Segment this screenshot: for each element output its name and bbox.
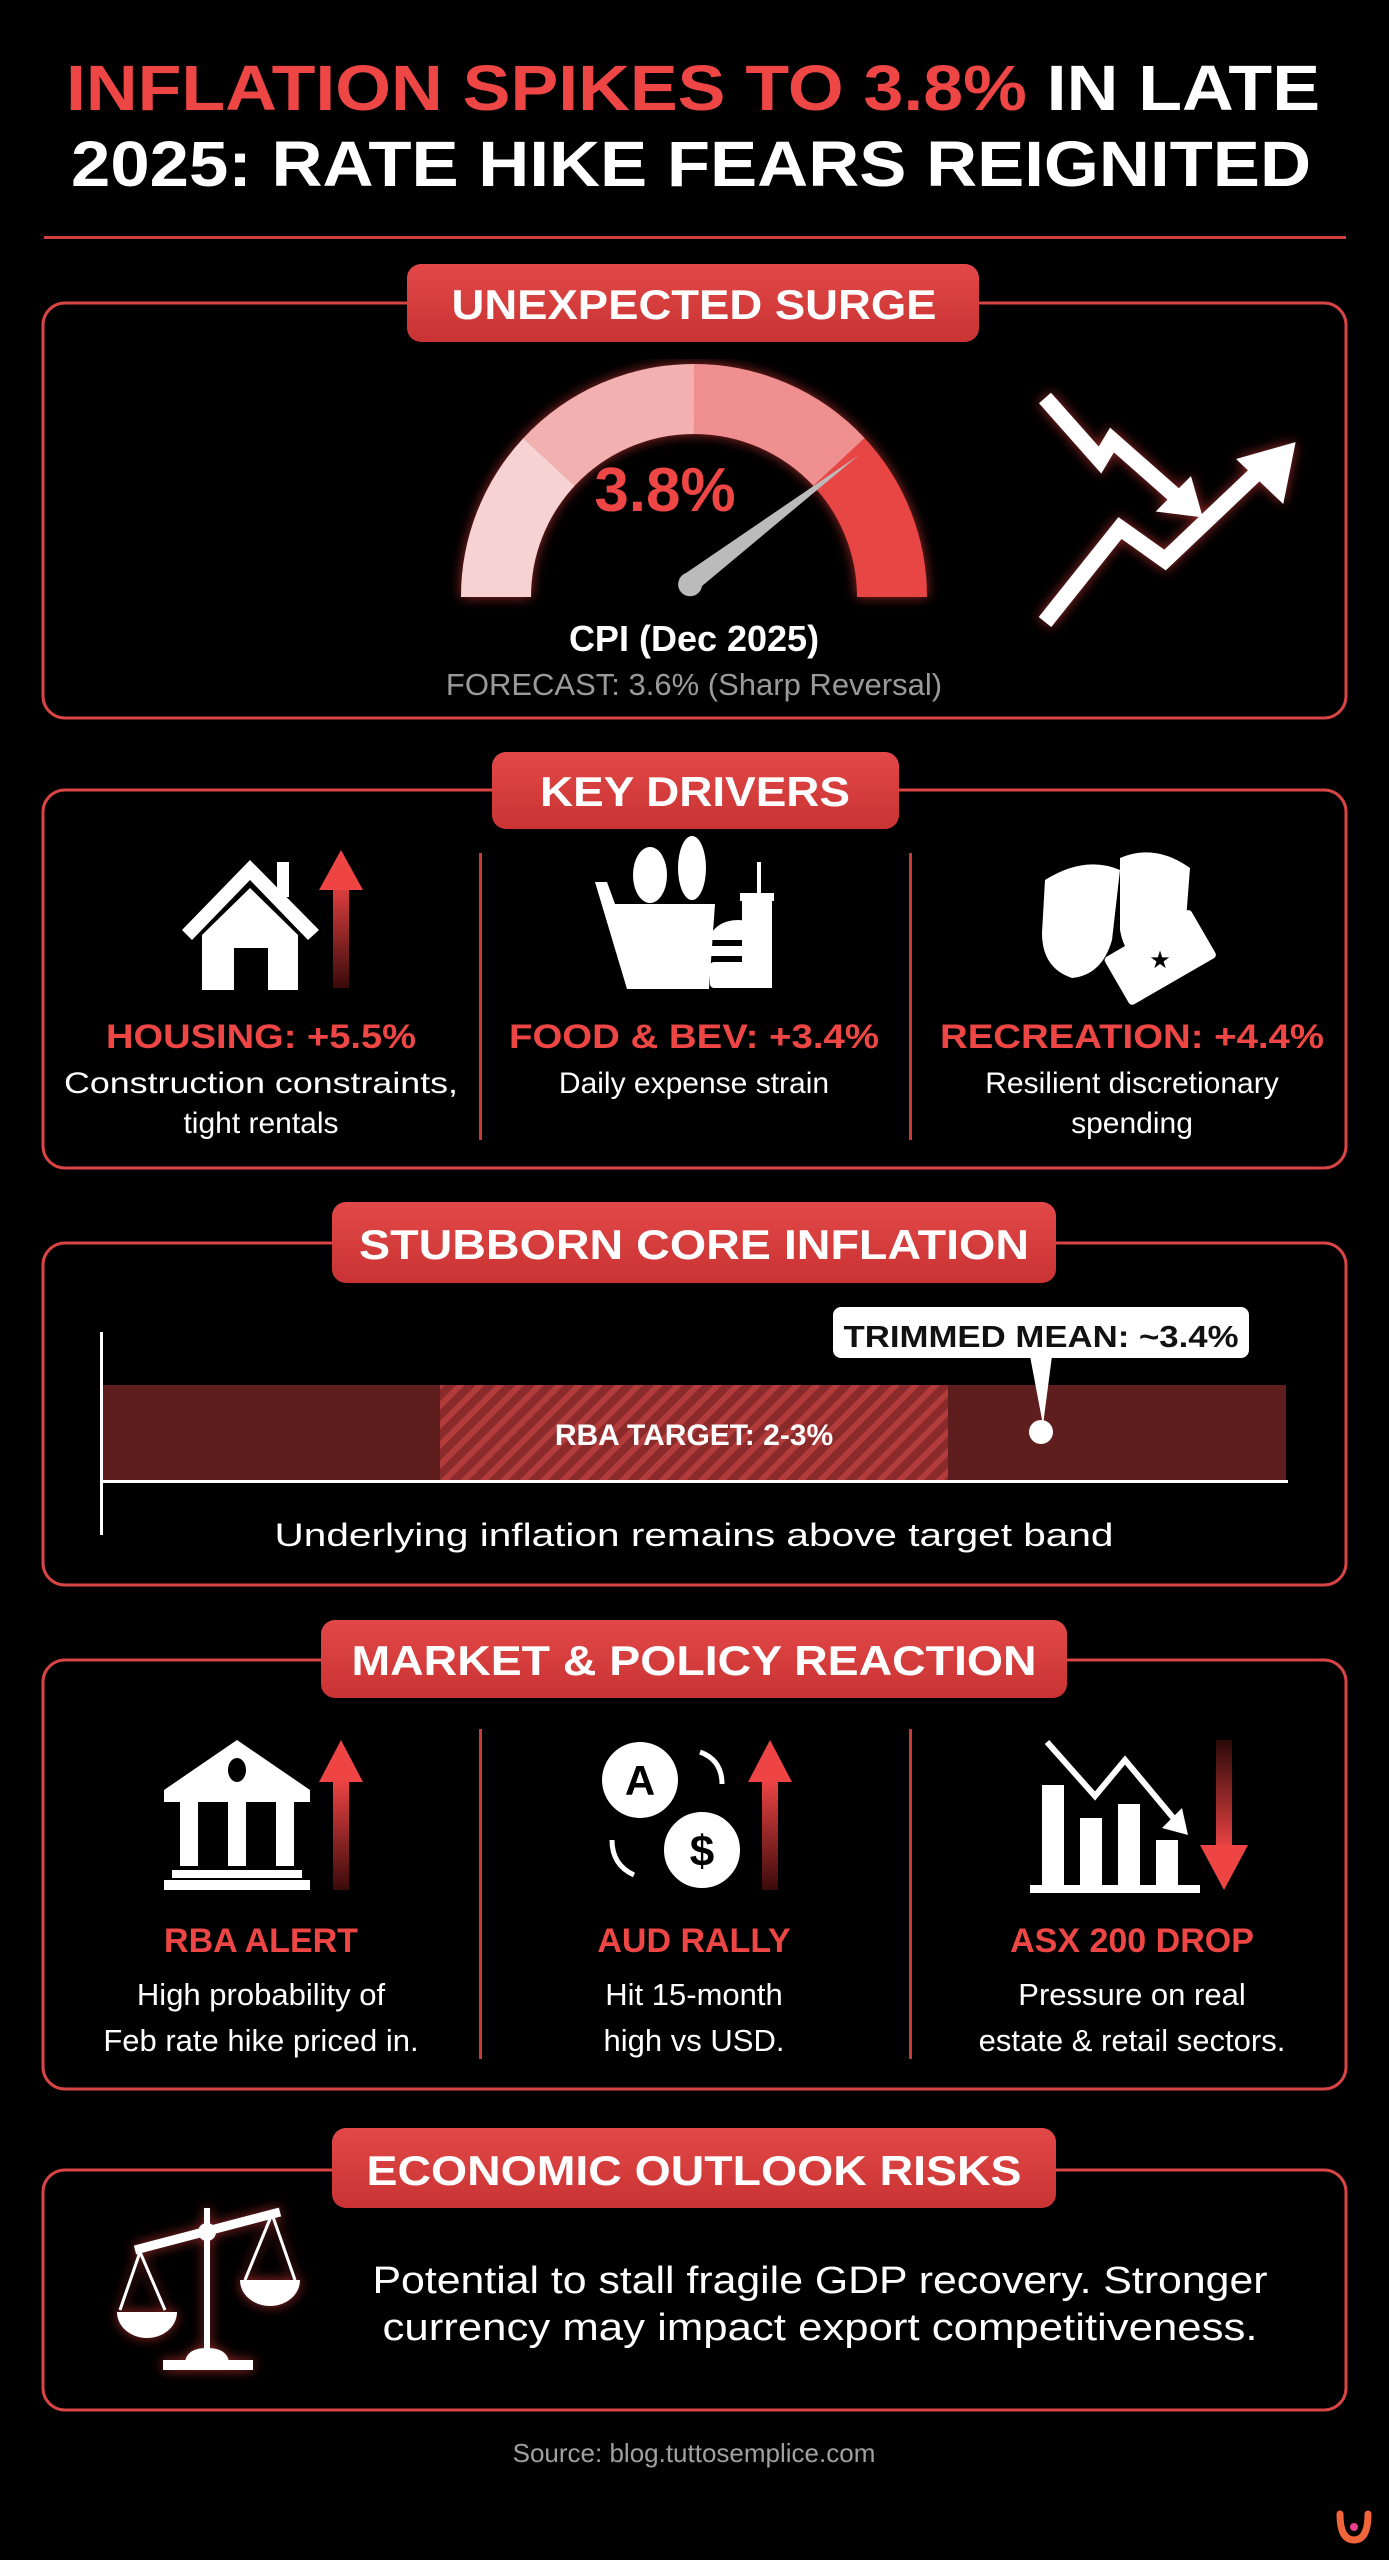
title: INFLATION SPIKES TO 3.8% IN LATE (66, 52, 1320, 124)
label: asx drop: ASX 200 DROP (1010, 1922, 1254, 1960)
callout: trimmed mean (833, 1307, 1249, 1444)
label: aud rally: high vs USD. (604, 2023, 784, 2058)
icon: shopping cart food (595, 836, 774, 989)
icon: logo (1340, 2514, 1368, 2540)
heading: unexpected surge (407, 264, 979, 342)
heading: economic outlook (332, 2128, 1056, 2208)
heading: stubborn core inflation: STUBBORN CORE INFLATION (359, 1221, 1029, 1268)
icon: currency exchange (602, 1742, 742, 1890)
label: recreation: spending (1071, 1107, 1193, 1140)
label: food: Daily expense strain (559, 1067, 829, 1100)
label: asx drop: Pressure on real (1018, 1977, 1246, 2012)
icon: currency exchange: A (625, 1757, 655, 1804)
icon: bank (164, 1740, 310, 1890)
label: food (509, 1018, 879, 1100)
heading: stubborn core inflation (332, 1202, 1056, 1283)
text: outlook: currency may impact export competitiveness. (382, 2307, 1258, 2349)
title: 2025: RATE HIKE FEARS REIGNITED (71, 128, 1311, 200)
panel: stubborn core inflation (43, 1202, 1346, 1585)
label: aud rally (597, 1922, 791, 2058)
panel: unexpected surge (43, 264, 1346, 718)
label: rba alert: High probability of (137, 1977, 385, 2012)
label: housing: HOUSING: +5.5% (106, 1018, 416, 1056)
title (66, 52, 1320, 200)
bar chart: target band (100, 1332, 1288, 1535)
icon: currency exchange: $ (690, 1827, 714, 1876)
label: housing: Construction constraints, (64, 1067, 458, 1100)
panel: market & policy reaction (43, 1620, 1346, 2089)
label: recreation (940, 1018, 1324, 1140)
heading: economic outlook: ECONOMIC OUTLOOK RISKS (366, 2147, 1022, 2194)
heading: unexpected surge: UNEXPECTED SURGE (452, 281, 936, 328)
icon: house (182, 860, 319, 990)
panel: economic outlook risks (43, 2128, 1346, 2410)
label: asx drop: estate & retail sectors. (979, 2023, 1285, 2058)
text: underlying: Underlying inflation remains above target band (274, 1517, 1114, 1553)
label: rba alert: RBA ALERT (164, 1922, 358, 1960)
gauge needle (678, 455, 859, 596)
label: rba alert: Feb rate hike priced in. (103, 2023, 419, 2058)
source: Source: blog.tuttosemplice.com (513, 2438, 875, 2468)
icon: down arrow asx (1200, 1740, 1248, 1890)
heading: market & policy (321, 1620, 1067, 1698)
icon: up arrow rba (319, 1740, 363, 1890)
text: outlook (372, 2260, 1268, 2349)
label: aud rally: Hit 15-month (605, 1977, 783, 2012)
bar chart: target band: RBA TARGET: 2-3% (555, 1419, 833, 1452)
text: outlook: Potential to stall fragile GDP recovery. Stronger (372, 2260, 1268, 2302)
icon: up arrow aud (748, 1740, 792, 1890)
icon: falling chart (1030, 1742, 1200, 1893)
label: recreation: Resilient discretionary (985, 1067, 1279, 1100)
forecast text: FORECAST: 3.6% (Sharp Reversal) (446, 667, 942, 702)
label: recreation: RECREATION: +4.4% (940, 1018, 1324, 1056)
gauge chart (496, 399, 892, 597)
label: food: FOOD & BEV: +3.4% (509, 1018, 879, 1056)
label: housing: tight rentals (183, 1107, 339, 1140)
value 3.8%: 3.8% (594, 456, 736, 525)
heading: key drivers (492, 752, 899, 829)
label: aud rally: AUD RALLY (597, 1922, 791, 1960)
icon: zigzag arrows (1045, 398, 1293, 622)
icon: theatre masks ticket (1042, 852, 1217, 1006)
label: asx drop (979, 1922, 1285, 2058)
panel: key drivers (43, 752, 1346, 1168)
heading: market & policy: MARKET & POLICY REACTION (352, 1637, 1036, 1684)
icon: up arrow housing (319, 850, 363, 988)
icon: theatre masks ticket: ★ (1149, 947, 1171, 974)
heading: key drivers: KEY DRIVERS (540, 768, 850, 815)
icon: scales (117, 2208, 300, 2370)
label: rba alert (103, 1922, 419, 2058)
label: housing (64, 1018, 458, 1140)
callout: trimmed mean: TRIMMED MEAN: ~3.4% (844, 1319, 1238, 1354)
label CPI: CPI (Dec 2025) (569, 618, 819, 659)
